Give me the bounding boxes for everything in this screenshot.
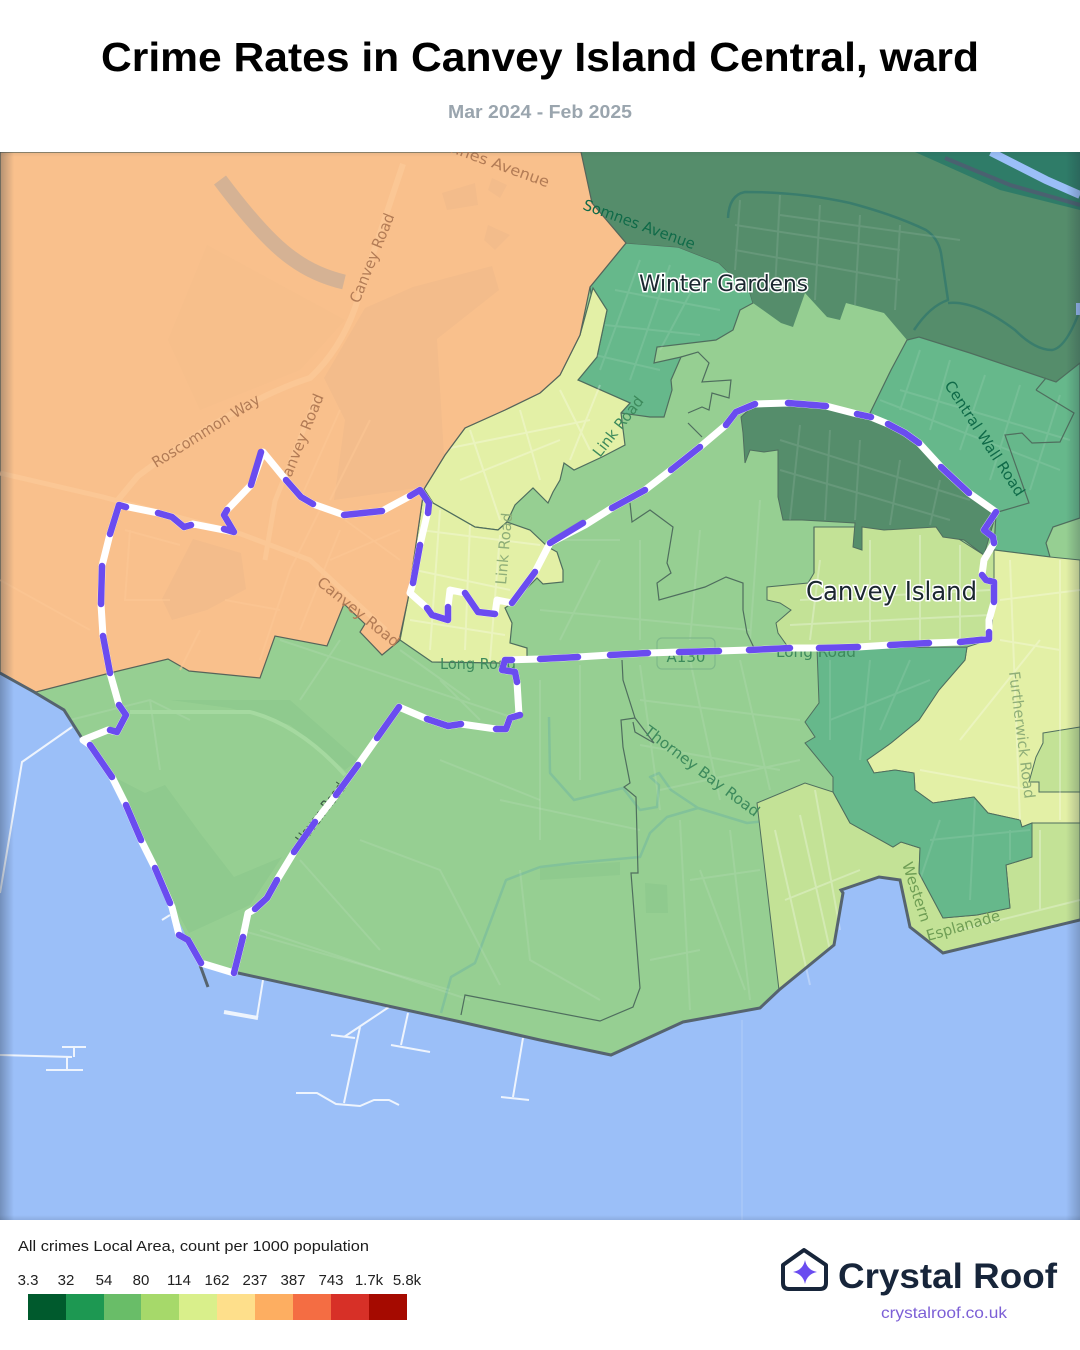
estuary channel top right	[915, 152, 1080, 315]
road labels: Central Wall Road	[941, 377, 1029, 500]
legend values: 54	[96, 1272, 112, 1289]
region: pale yellow inside ward, Link Road	[400, 489, 563, 663]
place label: Canvey Island: Canvey Island	[806, 577, 977, 607]
darker park areas on the orange	[162, 178, 510, 620]
region: yellow green Western Esplanade	[757, 783, 1080, 990]
road labels	[149, 130, 1038, 945]
water background	[0, 152, 1080, 1220]
canals on the dark green	[728, 192, 1080, 350]
region: orange high crime area	[0, 152, 626, 692]
ward boundary: white base line	[83, 403, 996, 973]
coastline	[0, 673, 1080, 1055]
road labels: Haven Road	[292, 779, 350, 847]
legend values: 387	[280, 1272, 306, 1289]
legend: colour scale	[18, 1238, 422, 1320]
legend values: 162	[204, 1272, 230, 1289]
legend values: 237	[242, 1272, 268, 1289]
legend values	[18, 1272, 422, 1289]
region: dark green inside ward	[741, 403, 996, 555]
road labels: Roscommon Way	[149, 390, 263, 471]
road labels: Long Road	[440, 655, 516, 673]
main road on the green	[130, 712, 345, 775]
place label: Winter Gardens: Winter Gardens	[639, 272, 808, 297]
legend title: All crimes Local Area, count per 1000 population	[18, 1238, 369, 1255]
legend values: 1.7k	[355, 1272, 384, 1289]
small canals and streams	[441, 717, 843, 1013]
legend values: 32	[58, 1272, 74, 1289]
region: mid green Winter Gardens	[578, 243, 753, 417]
region: mid green south east	[805, 647, 1032, 918]
region: yellow green Furtherwick patch	[1029, 727, 1080, 792]
region: yellow green patch inside ward	[767, 527, 994, 647]
road labels: Link Road	[589, 393, 647, 460]
region: pale yellow south east	[867, 550, 1080, 827]
legend swatches	[28, 1294, 407, 1320]
map edge shading	[0, 152, 1080, 1220]
legend values: 743	[318, 1272, 344, 1289]
region: dark green north	[581, 152, 1080, 382]
ward boundary: purple dashes	[90, 403, 996, 973]
road labels: Canvey Road	[313, 573, 403, 651]
road labels: Esplanade	[924, 907, 1002, 945]
road labels: Canvey Road	[346, 211, 398, 305]
panel: choropleth map	[0, 152, 1080, 1220]
streets on the pale regions	[410, 385, 1080, 985]
darker park areas on the green	[114, 700, 668, 933]
road labels: anvey Road	[278, 391, 328, 479]
legend values: 5.8k	[393, 1272, 422, 1289]
region: mid green Central Wall Road	[870, 337, 1080, 557]
subtitle: date range: Mar 2024 - Feb 2025	[448, 102, 632, 122]
road labels: Western	[898, 860, 934, 924]
region: pale yellow north of ward	[424, 288, 630, 530]
legend values: 114	[167, 1272, 191, 1289]
title: Crime Rates in Canvey Island Central, ward	[101, 34, 979, 80]
road labels: Link Road	[492, 512, 516, 585]
street network	[70, 195, 1070, 1010]
logo: Crystal Roof	[781, 1248, 1058, 1322]
A130 road shield: A130	[667, 648, 705, 666]
website: crystalroof.co.uk	[881, 1305, 1008, 1322]
legend values: 3.3	[18, 1272, 38, 1289]
road labels: Somnes Avenue	[581, 196, 698, 253]
boundary outlines between wards	[461, 352, 1074, 1021]
roads on the orange	[0, 164, 403, 670]
icon: house with star	[783, 1250, 826, 1289]
brand name: Crystal Roof	[838, 1257, 1057, 1296]
road labels: Thorney Bay Road	[640, 721, 763, 820]
reservoir strip on the orange	[220, 180, 344, 282]
road labels: Long Road	[776, 643, 856, 661]
piers and jetties	[0, 727, 742, 1220]
land: main green area	[0, 152, 1080, 1055]
road labels: Furtherwick Road	[1005, 670, 1038, 800]
A130 road shield	[657, 638, 715, 669]
legend values: 80	[133, 1272, 149, 1289]
